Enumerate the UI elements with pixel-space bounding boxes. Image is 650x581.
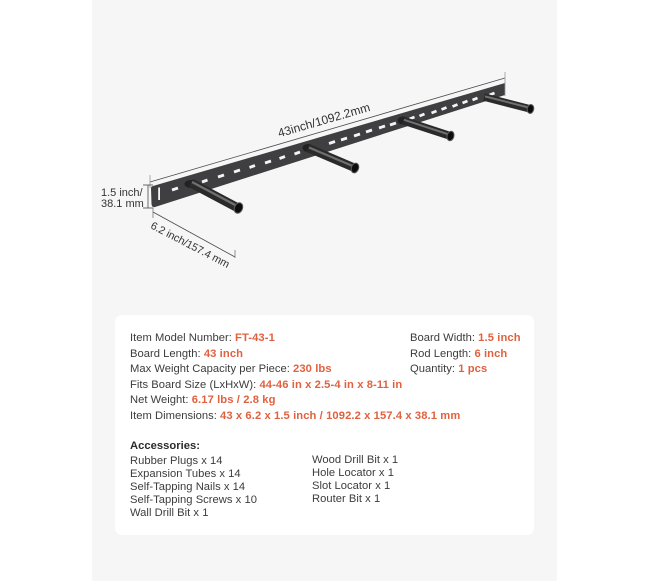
dimension line: length <box>150 72 505 188</box>
mounting rod 4 <box>484 96 535 114</box>
spec: model number: Item Model Number: FT-43-1 <box>130 332 275 344</box>
metal bracket plate <box>151 83 505 207</box>
accessories list: left column: Self-Tapping Screws x 10 <box>130 494 257 506</box>
label: depth: 6.2 inch/157.4 mm <box>148 220 231 271</box>
accessories list: right column: Wood Drill Bit x 1 <box>312 454 398 466</box>
label: height: 38.1 mm <box>101 198 144 210</box>
label: length: 43inch/1092.2mm <box>276 100 372 140</box>
spec: rod length: Rod Length: 6 inch <box>410 348 507 360</box>
mounting rod 2 <box>302 144 360 174</box>
accessories list: left column <box>130 455 257 519</box>
accessories list: left column: Self-Tapping Nails x 14 <box>130 481 245 493</box>
mounting rod 1 <box>184 180 244 215</box>
background panel <box>92 0 557 581</box>
dimension line: height <box>143 185 153 208</box>
dimension line: depth <box>153 208 235 258</box>
accessories list: right column: Slot Locator x 1 <box>312 480 390 492</box>
spec: fits board size: Fits Board Size (LxHxW): 44-46 in x 2.5-4 in x 8-11 in <box>130 379 402 391</box>
spec: item dimensions: Item Dimensions: 43 x 6.2 x 1.5 inch / 1092.2 x 157.4 x 38.1 mm <box>130 410 460 422</box>
specifications card <box>115 315 534 535</box>
accessories list: right column <box>312 454 398 505</box>
accessories list: right column: Router Bit x 1 <box>312 493 380 505</box>
mounting rod 3 <box>398 116 455 142</box>
accessories heading: Accessories: <box>130 440 200 452</box>
spec: net weight: Net Weight: 6.17 lbs / 2.8 kg <box>130 394 276 406</box>
spec: quantity: Quantity: 1 pcs <box>410 363 487 375</box>
spec: board length: Board Length: 43 inch <box>130 348 243 360</box>
accessories list: right column: Hole Locator x 1 <box>312 467 394 479</box>
accessories list: left column: Wall Drill Bit x 1 <box>130 507 208 519</box>
label: height: 1.5 inch/ <box>101 187 144 199</box>
spec: max weight: Max Weight Capacity per Piece: 230 lbs <box>130 363 332 375</box>
accessories list: left column: Expansion Tubes x 14 <box>130 468 241 480</box>
spec: board width: Board Width: 1.5 inch <box>410 332 521 344</box>
accessories list: left column: Rubber Plugs x 14 <box>130 455 223 467</box>
